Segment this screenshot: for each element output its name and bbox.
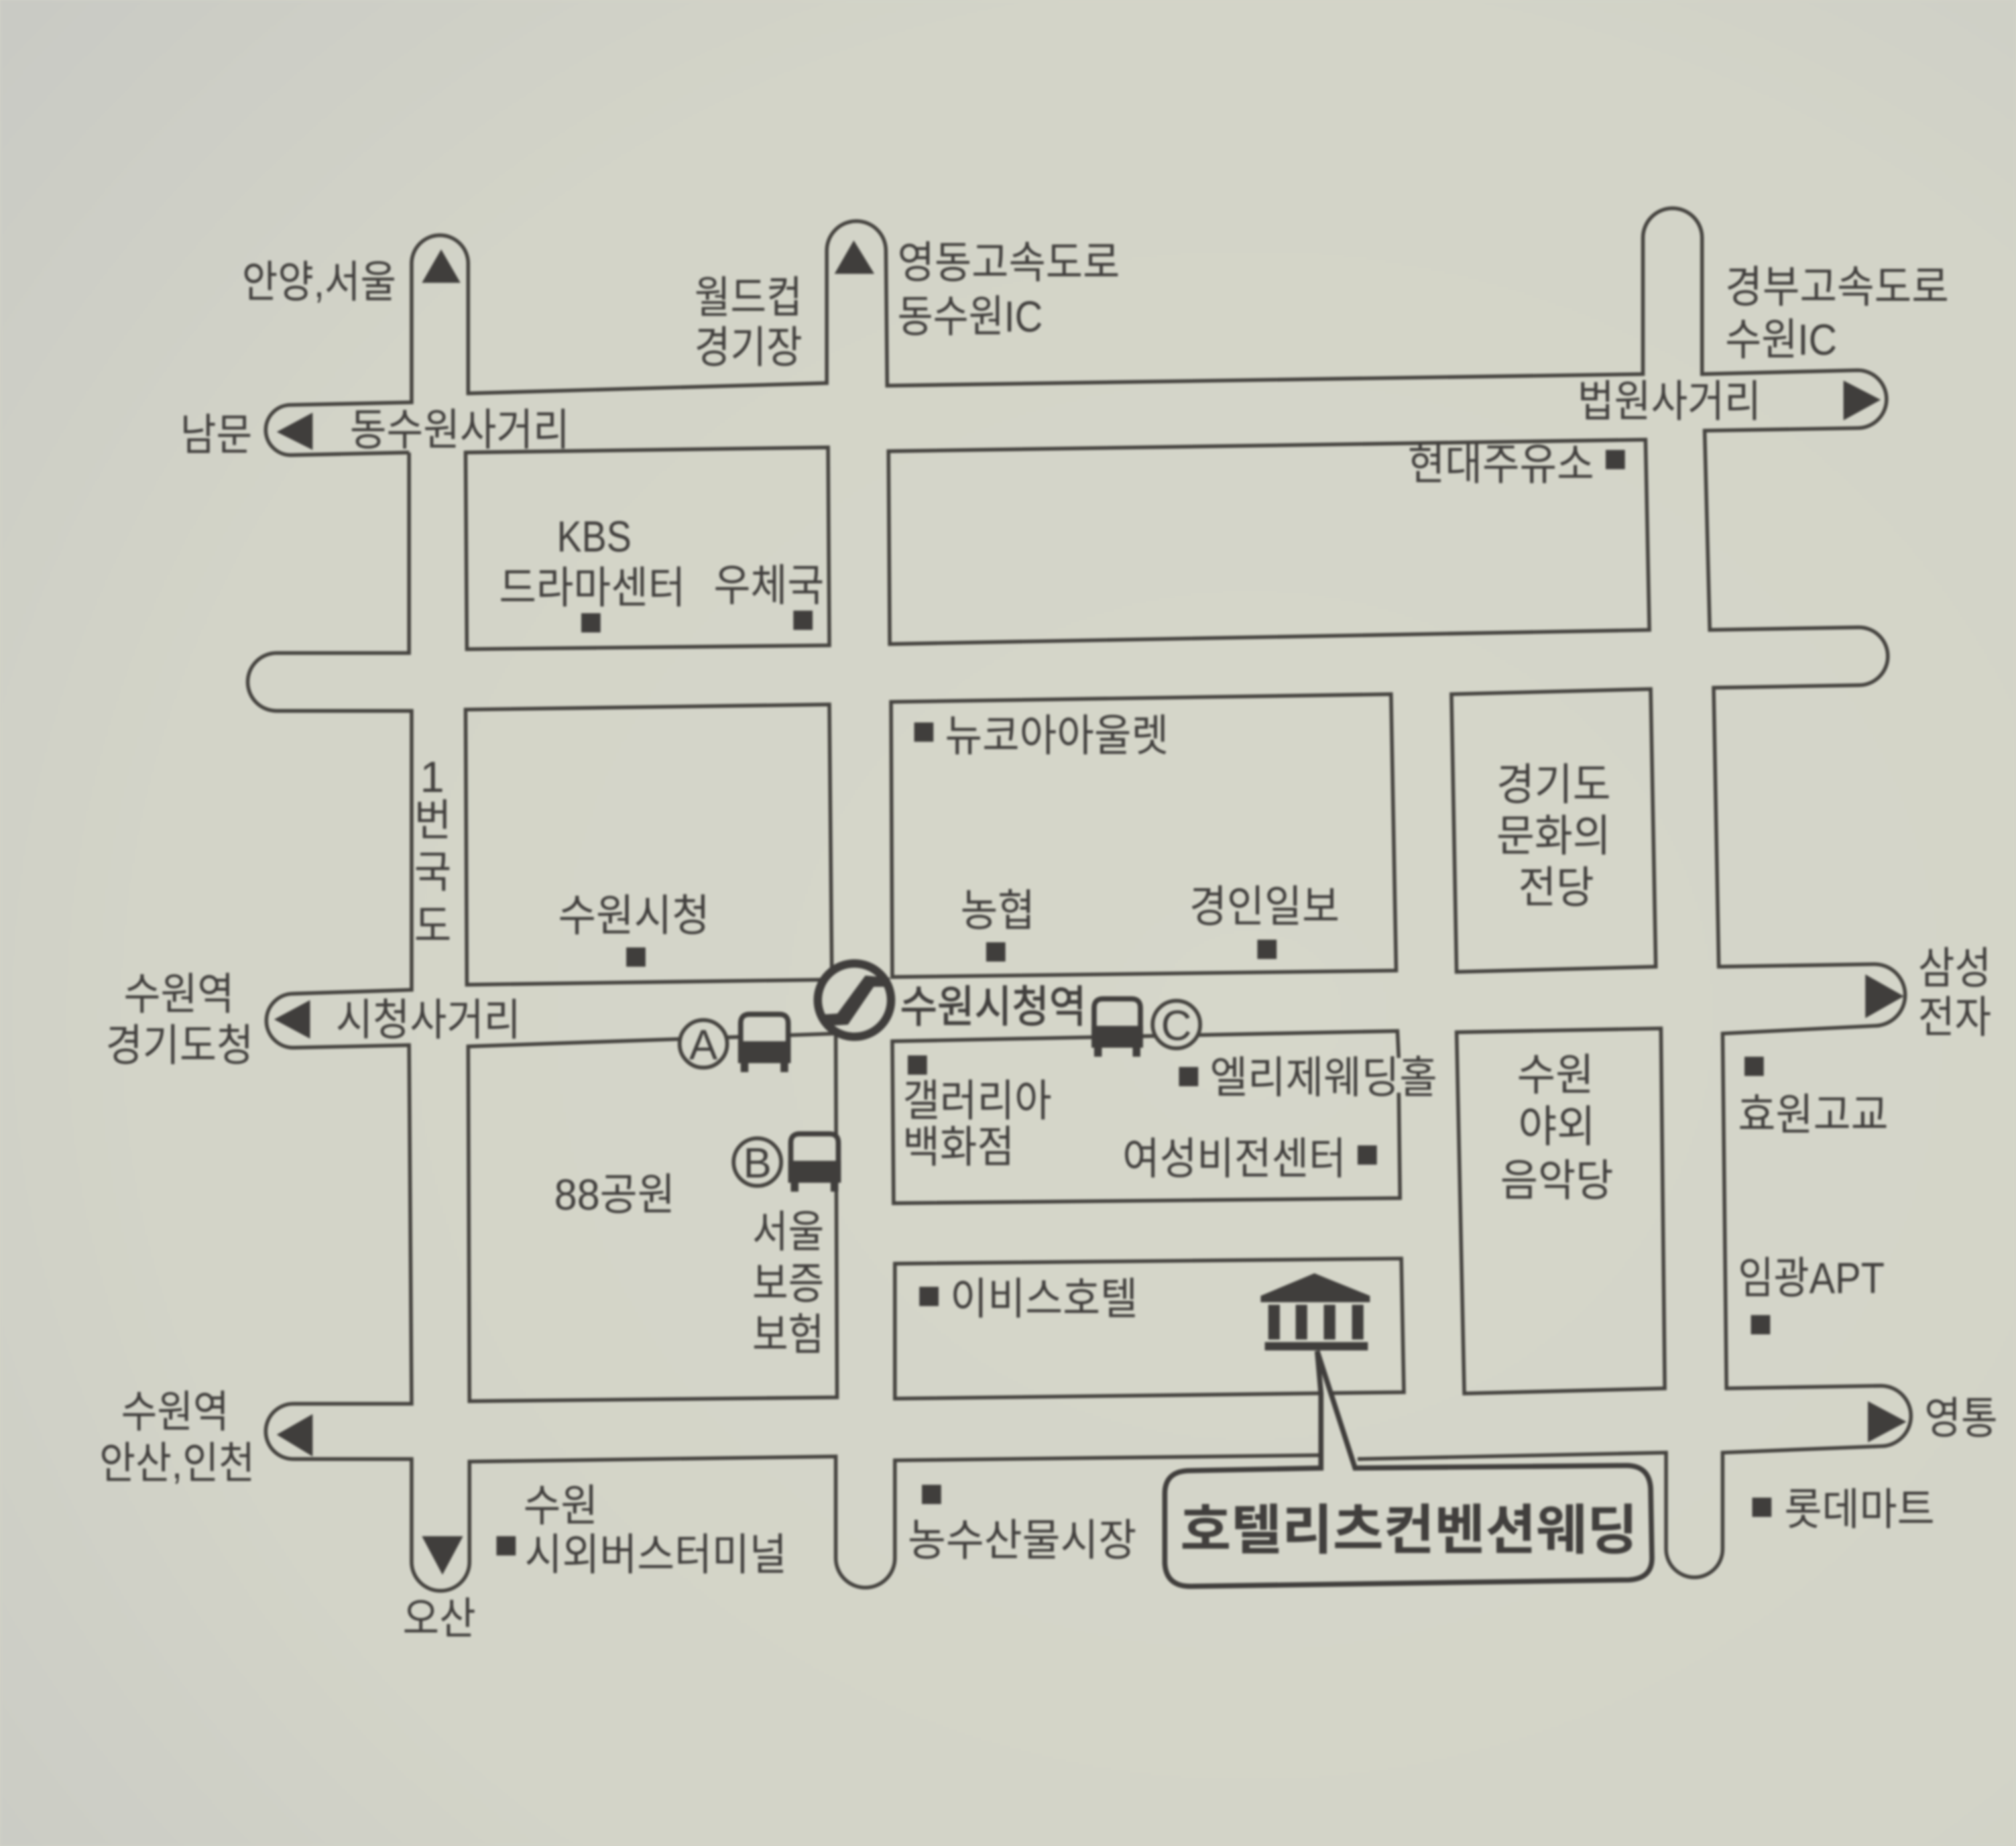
label: 경인일보: 경인일보 — [1189, 882, 1340, 931]
label: 1번국도 (vertical): 국 — [414, 848, 451, 897]
label: 수원역: 수원역 — [124, 970, 234, 1019]
label: 뉴코아아울렛: 뉴코아아울렛 — [945, 711, 1169, 760]
label: 야외: 야외 — [1519, 1102, 1596, 1151]
label: 1번국도 (vertical): 번 — [414, 796, 451, 845]
label: 영통: 영통 — [1924, 1394, 1998, 1443]
label: 여성비전센터: 여성비전센터 — [1122, 1134, 1346, 1183]
label: 동수원IC: 동수원IC — [898, 292, 1043, 341]
icon: bus stop C: C — [1161, 1002, 1191, 1049]
label: 문화의: 문화의 — [1496, 811, 1611, 860]
label: 수원 (music hall): 수원 — [1517, 1051, 1594, 1100]
label: 동수원사거리: 동수원사거리 — [350, 405, 570, 454]
label: 농협: 농협 — [961, 886, 1035, 935]
block: outdoor music hall — [1457, 1029, 1665, 1393]
label: 영동고속도로: 영동고속도로 — [898, 238, 1120, 287]
label: 1번국도 (vertical): 도 — [414, 901, 451, 950]
label: 음악당: 음악당 — [1500, 1156, 1613, 1205]
label: 전자: 전자 — [1918, 992, 1991, 1041]
label: 경기도청: 경기도청 — [106, 1021, 253, 1070]
block: Hyundai gas station — [888, 440, 1649, 644]
label: 법원사거리: 법원사거리 — [1578, 377, 1761, 426]
label: 시청사거리: 시청사거리 — [336, 995, 521, 1044]
block: New Core outlet — [891, 694, 1396, 977]
arrows: road direction triangles — [274, 241, 1907, 1574]
label: 오산: 오산 — [403, 1595, 476, 1643]
label: 1번국도 (vertical): 1 — [420, 752, 444, 801]
road network outline — [248, 209, 1911, 1591]
label: 시외버스터미널: 시외버스터미널 — [525, 1530, 787, 1579]
icon: bus stop B — [733, 1134, 841, 1192]
label: 삼성: 삼성 — [1918, 944, 1991, 993]
label: 롯데마트: 롯데마트 — [1784, 1485, 1935, 1534]
label: 월드컵: 월드컵 — [695, 273, 803, 322]
label: 1번국도 (vertical) — [414, 752, 451, 950]
label: 이비스호텔: 이비스호텔 — [950, 1274, 1138, 1323]
label: 현대주유소: 현대주유소 — [1408, 440, 1594, 489]
label: 수원 (terminal): 수원 — [524, 1481, 598, 1530]
label: 수원시청역: 수원시청역 — [900, 982, 1086, 1031]
label: 안양,서울: 안양,서울 — [242, 257, 396, 306]
block: 88 park — [468, 1033, 837, 1401]
callout: Hotel Ritz Convention Wedding — [1165, 1351, 1652, 1587]
label: 농수산물시장: 농수산물시장 — [908, 1516, 1136, 1565]
callout: Hotel Ritz Convention Wedding: 호텔리츠컨벤션웨딩 — [1180, 1501, 1638, 1561]
label: 보험: 보험 — [752, 1310, 824, 1359]
label: 보증: 보증 — [752, 1259, 824, 1308]
icon: bus stop A — [680, 1015, 791, 1072]
block: Galleria — [892, 1031, 1400, 1203]
label: 안산,인천: 안산,인천 — [99, 1439, 255, 1488]
block: Gyeonggi arts center — [1451, 689, 1656, 972]
label: 경부고속도로: 경부고속도로 — [1725, 263, 1949, 312]
label: 엘리제웨딩홀: 엘리제웨딩홀 — [1209, 1053, 1437, 1102]
icon: bus stop B: B — [744, 1140, 772, 1187]
label: 수원역 (lower): 수원역 — [121, 1387, 229, 1436]
label: 서울: 서울 — [752, 1208, 824, 1257]
block: Ibis hotel — [895, 1259, 1404, 1399]
label: 백화점: 백화점 — [902, 1122, 1014, 1171]
label: 우체국: 우체국 — [713, 561, 824, 610]
label: 수원IC: 수원IC — [1725, 315, 1837, 364]
icon: bus stop A: A — [689, 1022, 718, 1069]
icon: bus stop C — [1091, 999, 1200, 1057]
label: 임광APT: 임광APT — [1738, 1254, 1885, 1303]
label: 88공원: 88공원 — [554, 1170, 675, 1219]
block: Suwon city hall — [465, 705, 832, 985]
icon: subway station — [818, 964, 891, 1037]
block: KBS drama center — [465, 447, 829, 649]
label: 수원시청: 수원시청 — [558, 891, 710, 940]
label: 효원고교: 효원고교 — [1738, 1090, 1889, 1139]
landmark square markers — [496, 450, 1771, 1556]
icon: wedding hall building — [1260, 1273, 1370, 1350]
label: 드라마센터: 드라마센터 — [499, 563, 685, 612]
label: 갤러리아: 갤러리아 — [902, 1076, 1052, 1125]
label: 전당: 전당 — [1519, 863, 1594, 912]
label: KBS: KBS — [557, 512, 632, 561]
label: 경기장: 경기장 — [695, 323, 803, 372]
label: 남문: 남문 — [180, 410, 252, 459]
label: 경기도: 경기도 — [1496, 760, 1611, 809]
